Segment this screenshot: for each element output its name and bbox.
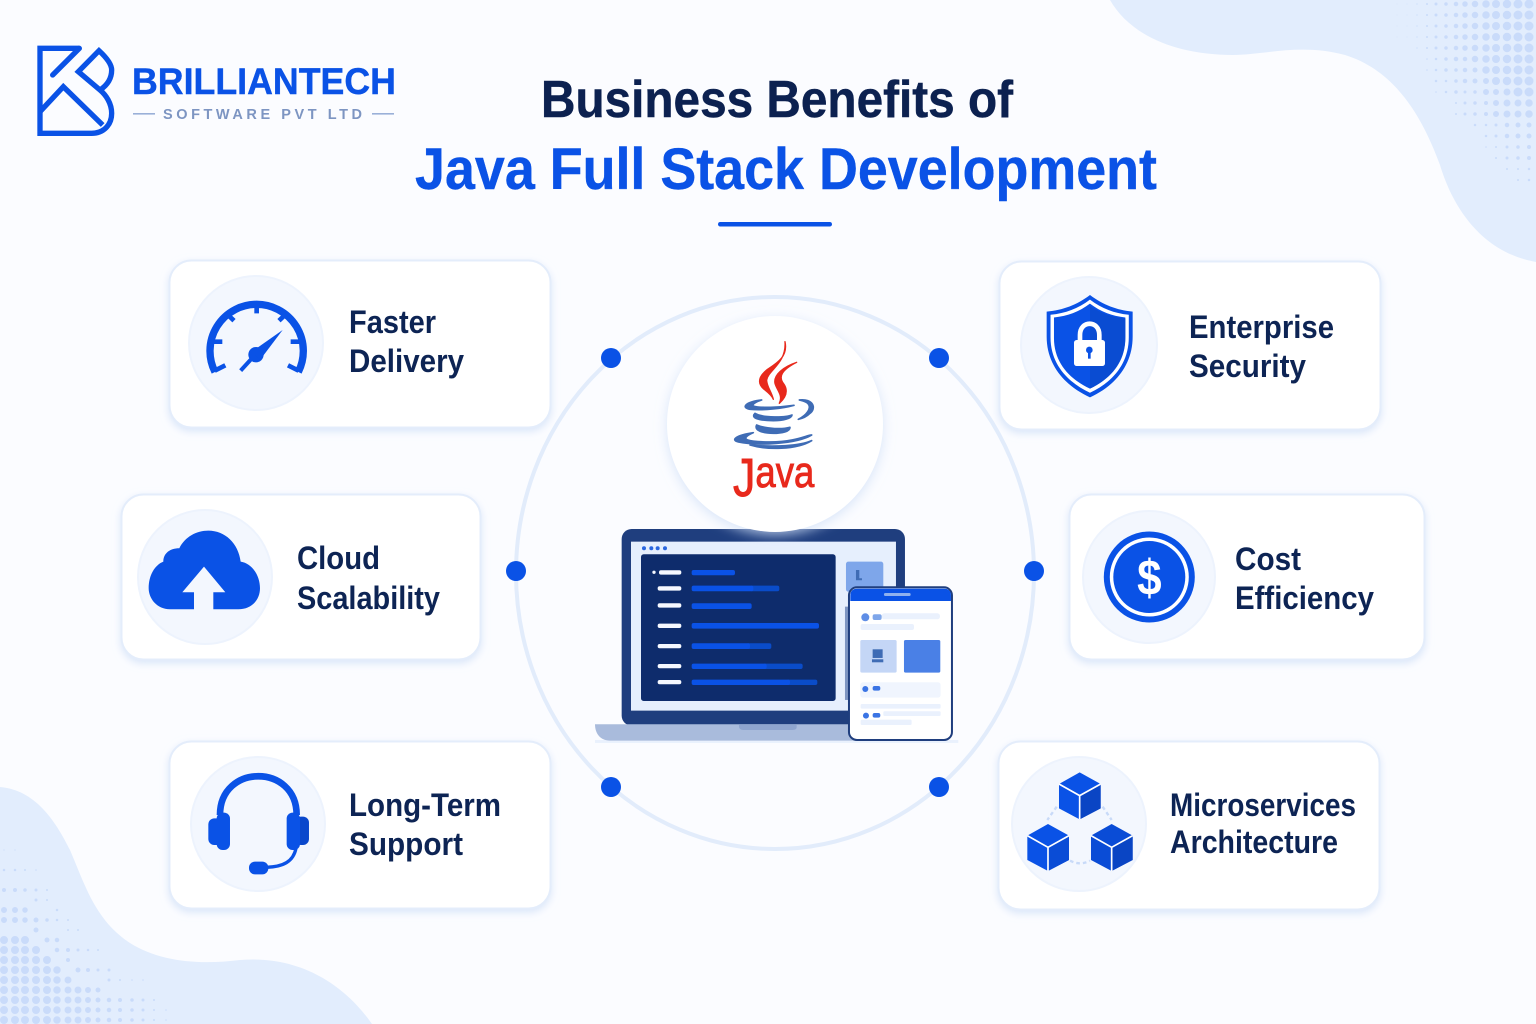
label: Support	[349, 826, 463, 862]
panel: Long-Term Support	[170, 742, 550, 908]
panel: Cloud Scalability	[122, 494, 480, 660]
label	[349, 304, 464, 379]
label: Enterprise	[1189, 309, 1334, 345]
label: Faster	[349, 304, 436, 340]
label: Efficiency	[1235, 580, 1374, 616]
label	[297, 540, 440, 616]
logo mark	[40, 48, 112, 133]
icon: dollar coin: $	[1137, 549, 1162, 606]
icon: cloud upload	[149, 531, 260, 609]
tablet	[849, 587, 952, 740]
logo wordmark: BRILLIANTECH	[132, 61, 396, 102]
logo: Brilliantech Software Pvt Ltd	[40, 48, 396, 133]
panel: Microservices Architecture	[998, 742, 1380, 910]
label: Cloud	[297, 540, 380, 576]
icon: three connected cubes	[1027, 772, 1133, 871]
icon: security shield with padlock	[1047, 295, 1133, 397]
label	[1235, 541, 1374, 616]
panel: Enterprise Security	[1000, 262, 1380, 430]
icon: speedometer	[210, 302, 303, 372]
icon: Java steaming cup	[735, 342, 813, 448]
Java logo badge	[667, 316, 883, 532]
icon: headset	[208, 776, 309, 874]
Java wordmark: ava	[755, 447, 815, 497]
label	[1189, 309, 1334, 384]
Java wordmark: J	[733, 447, 755, 508]
label: Security	[1189, 348, 1306, 384]
label: Microservices	[1170, 787, 1356, 823]
panel: Faster Delivery	[170, 260, 550, 428]
title	[415, 71, 1157, 226]
background blob: top right with halftone dots	[1110, 0, 1536, 262]
label: Long-Term	[349, 787, 501, 823]
label: Delivery	[349, 343, 464, 379]
title underline	[718, 222, 832, 226]
title line 2: Java Full Stack Development	[415, 137, 1157, 202]
panel: Cost Efficiency	[1070, 494, 1424, 660]
title line 1: Business Benefits of	[541, 71, 1014, 129]
label: Architecture	[1170, 824, 1338, 860]
label	[349, 787, 501, 862]
label	[1170, 787, 1356, 860]
label: Cost	[1235, 541, 1301, 577]
icon: dollar coin	[1104, 532, 1195, 622]
logo tagline: SOFTWARE PVT LTD	[163, 107, 362, 123]
central ring with connector dots	[506, 297, 1044, 849]
laptop and tablet illustration	[595, 529, 958, 743]
laptop	[595, 529, 958, 743]
background blob: bottom left with halftone dots	[0, 787, 372, 1024]
label: Scalability	[297, 580, 440, 616]
